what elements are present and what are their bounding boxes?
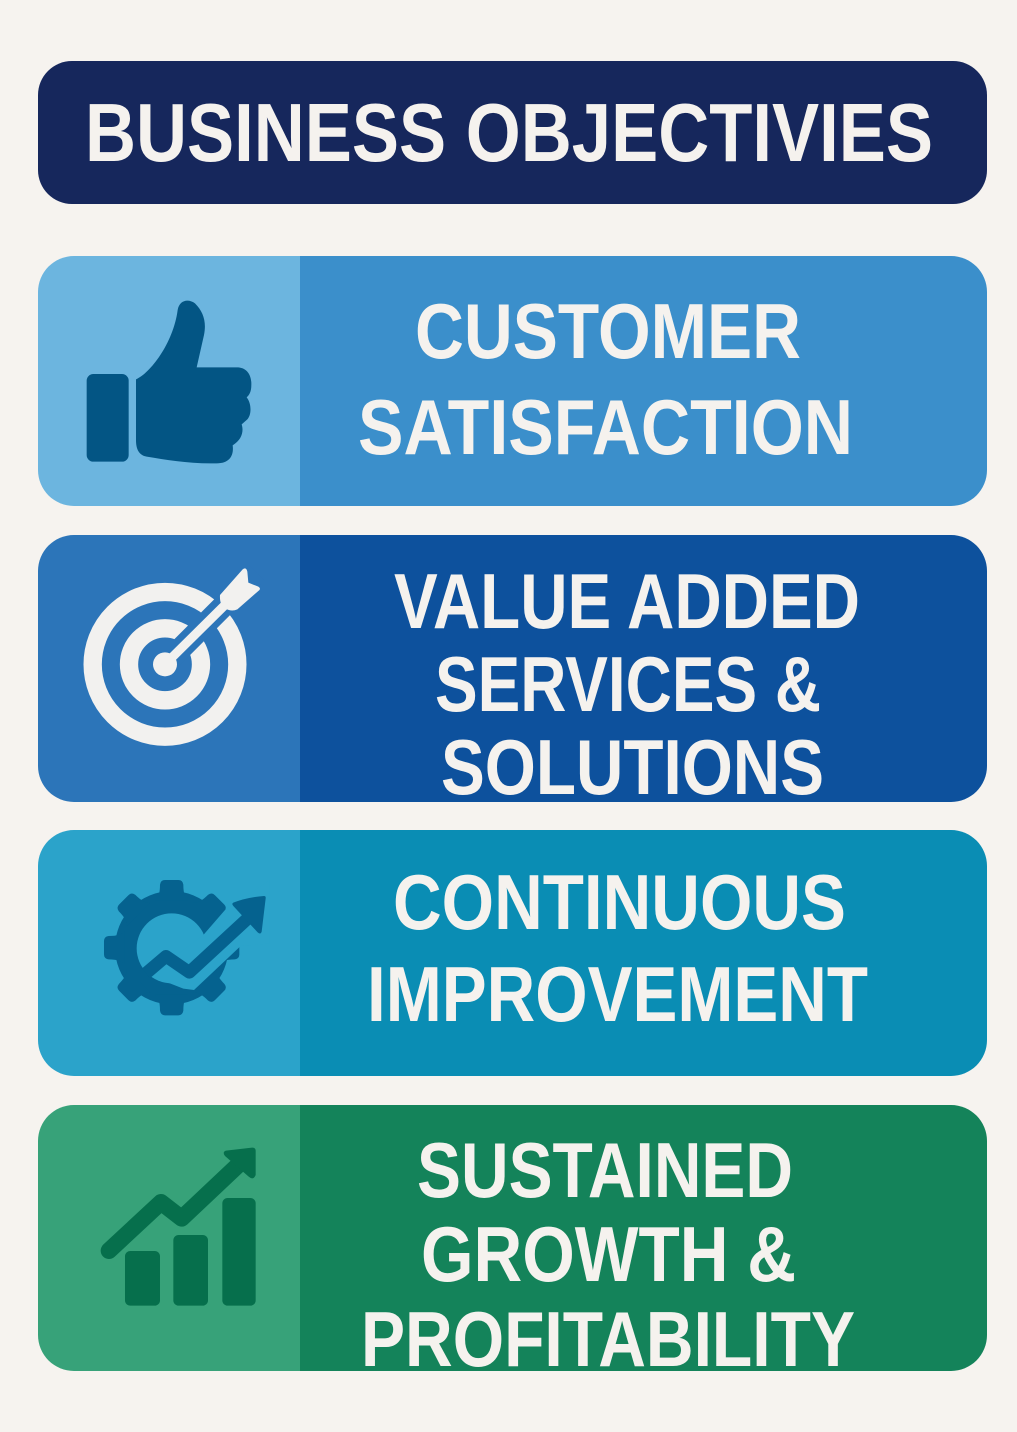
text: continuous improvement: IMPROVEMENT (367, 950, 868, 1038)
text: value added services and solutions: SERVICES & (435, 640, 821, 728)
text: sustained growth and profitability: SUSTAINED (417, 1126, 793, 1214)
icon: bar chart with rising arrow (109, 1148, 256, 1306)
text: customer satisfaction: CUSTOMER (415, 287, 801, 375)
panel: continuous improvement (38, 830, 987, 1076)
icon: target with arrow (93, 568, 260, 737)
icon: gear with rising arrow (104, 880, 270, 1015)
text: continuous improvement: CONTINUOUS (393, 858, 846, 946)
text: customer satisfaction: SATISFACTION (358, 383, 853, 471)
icon: thumbs up (87, 301, 251, 463)
text: customer satisfaction (358, 287, 853, 471)
text: sustained growth and profitability: PROFITABILITY (361, 1295, 855, 1383)
text: sustained growth and profitability: GROWTH & (421, 1210, 796, 1298)
text: continuous improvement (367, 858, 868, 1038)
text: value added services and solutions (394, 557, 860, 811)
text: value added services and solutions: VALUE ADDED (394, 557, 860, 645)
text: value added services and solutions: SOLUTIONS (441, 723, 824, 811)
panel: customer satisfaction (38, 256, 987, 506)
panel: sustained growth and profitability (38, 1105, 987, 1383)
panel: value added services and solutions (38, 535, 987, 811)
text: sustained growth and profitability (361, 1126, 855, 1383)
title banner (38, 61, 987, 204)
